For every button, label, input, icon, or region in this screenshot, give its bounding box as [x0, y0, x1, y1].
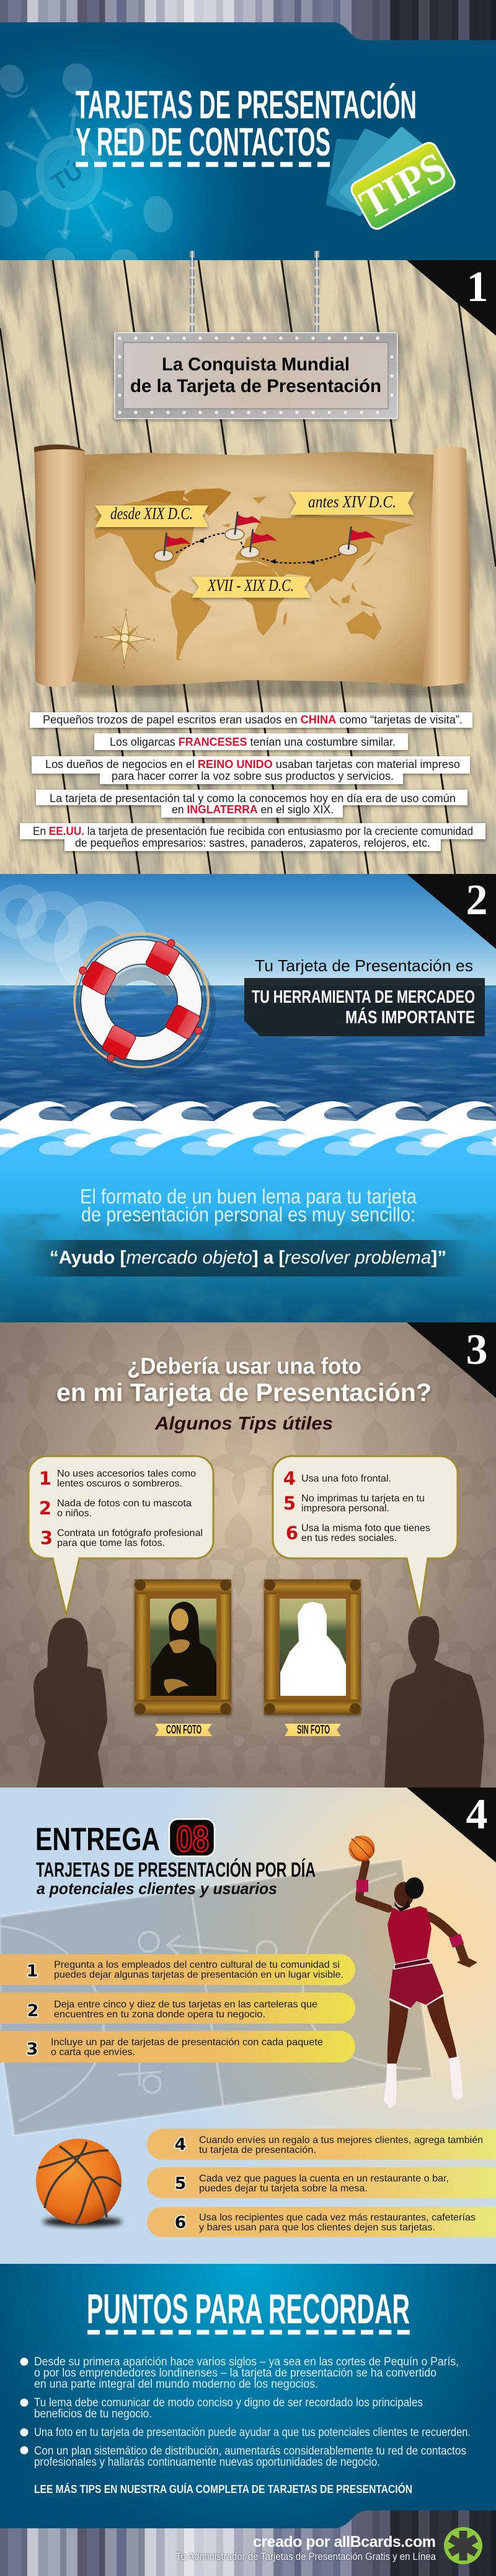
subheading — [36, 1858, 316, 1898]
tip bar 1 — [0, 1954, 355, 1985]
speech bubble: left: o niños. — [57, 1508, 92, 1519]
text boxes: history: Pequeños trozos de papel escritos eran usados en CHINA como “tarjetas de visita”. — [43, 714, 463, 726]
icon: network of contacts — [0, 58, 177, 274]
bullet points: Desde su primera aparición hace varios siglos – ya sea en las cortes de Pequín o París, — [34, 2356, 459, 2369]
banner: antes XIV: antes XIV D.C. — [308, 492, 396, 511]
number badge 3: 3 — [466, 1326, 487, 1374]
tip bar 5: 5 — [175, 2174, 186, 2193]
number badge 3 — [407, 1322, 496, 1398]
tip bar 4: tu tarjeta de presentación. — [199, 2145, 316, 2155]
read more link: LEE MÁS TIPS EN NUESTRA GUÍA COMPLETA DE TARJETAS DE PRESENTACIÓN — [34, 2482, 412, 2495]
roll: left — [34, 445, 85, 687]
jersey — [388, 1906, 432, 1965]
tip bar 5: puedes dejar tu tarjeta sobre la mesa. — [199, 2183, 368, 2194]
panel: section 3 wall — [0, 1322, 496, 1788]
wood background — [0, 260, 496, 874]
compass rose: N — [124, 608, 128, 613]
sky — [0, 874, 496, 986]
compass rose — [94, 608, 156, 670]
panel: puntos para recordar — [0, 2264, 496, 2576]
footer stripes — [0, 2510, 496, 2576]
water — [0, 1156, 496, 1323]
number badge 2 — [407, 874, 496, 949]
tip bar 4: 4 — [175, 2135, 186, 2154]
tip bar 6: Usa los recipientes que cada vez más restaurantes, cafeterías — [199, 2212, 476, 2223]
text boxes: history: En EE.UU. la tarjeta de presentación fue recibida con entusiasmo por la creciente comunidad — [33, 825, 473, 837]
tip bar 2 — [0, 1993, 355, 2024]
icon: life ring — [74, 933, 213, 1075]
painting: Mona Lisa — [150, 1599, 216, 1696]
waves — [0, 1096, 496, 1158]
text boxes: history: La tarjeta de presentación tal y como la conocemos hoy en día era de uso común — [50, 792, 456, 805]
flags — [154, 512, 376, 561]
speech bubble: left: para que tome las fotos. — [57, 1538, 165, 1548]
ribbon: con foto: CON FOTO — [166, 1723, 202, 1737]
banner: desde XIX: desde XIX D.C. — [110, 504, 193, 523]
ball — [348, 1835, 374, 1861]
ribbon: sin foto: SIN FOTO — [297, 1723, 330, 1737]
number badge 2: 2 — [466, 876, 487, 924]
roll: right — [422, 447, 469, 688]
man silhouette — [384, 1616, 484, 1788]
wallpaper — [0, 1322, 496, 1788]
world map — [94, 488, 414, 670]
white silhouette — [280, 1602, 346, 1696]
heading dashed underline — [87, 2330, 410, 2334]
woman silhouette — [33, 1618, 107, 1788]
background — [0, 1788, 496, 2264]
subheading: TARJETAS DE PRESENTACIÓN POR DÍA — [36, 1858, 316, 1881]
tip bar 3 — [0, 2031, 355, 2063]
shoes — [384, 2064, 396, 2108]
title — [76, 82, 417, 164]
subheading: a potenciales clientes y usuarios — [37, 1879, 277, 1898]
number badge 4 — [407, 1788, 496, 1862]
callout: herramienta — [244, 978, 485, 1036]
text boxes: history: de pequeños empresarios: sastres, panaderos, zapateros, relojeros, etc. — [75, 837, 430, 849]
legs — [388, 2001, 408, 2064]
text: tu tarjeta es: Tu Tarjeta de Presentación es — [255, 956, 473, 975]
parchment scroll — [20, 445, 485, 851]
speech bubble: left: 3 — [40, 1527, 53, 1548]
metal sign: La Conquista Mundial — [162, 354, 350, 375]
speech bubble: right: en tus redes sociales. — [301, 1533, 397, 1543]
tip bar 6: y bares usan para que los clientes dejen sus tarjetas. — [199, 2222, 435, 2233]
text boxes: history: Los dueños de negocios en el REINO UNIDO usaban tarjetas con material impreso — [45, 758, 460, 771]
ghost rings — [0, 891, 136, 983]
head — [394, 1882, 414, 1906]
tip bar 3: o carta que envíes. — [51, 2047, 135, 2058]
tip bar 6: 6 — [175, 2213, 186, 2232]
metal sign: de la Tarjeta de Presentación — [130, 376, 381, 396]
text boxes: history: para hacer correr la voz sobre sus productos y servicios. — [112, 770, 394, 782]
heading: ¿Debería usar una foto — [127, 1353, 361, 1379]
bullet points: en una parte integral del mundo moderno de los negocios. — [34, 2378, 318, 2391]
tip bar 1: 1 — [27, 1962, 38, 1981]
chains — [192, 251, 317, 333]
speech bubble: right: impresora personal. — [301, 1503, 389, 1514]
tip bar 1: Pregunta a los empleados del centro cultural de tu comunidad si — [54, 1960, 340, 1970]
heading — [56, 1353, 432, 1407]
icon: TIPS cards: TIPS — [352, 142, 454, 228]
ribbon: con foto — [155, 1723, 212, 1737]
bullet points: profesionales y hallarás continuamente nuevas oportunidades de negocio. — [34, 2456, 380, 2469]
speech bubble: right: Usa la misma foto que tienes — [301, 1523, 430, 1534]
tip bar 3: Incluye un par de tarjetas de presentación con cada paquete — [51, 2037, 323, 2048]
blue header background — [0, 22, 496, 260]
compass rose: S — [123, 666, 125, 670]
number badge 1 — [407, 260, 496, 336]
compass rose: W — [94, 635, 99, 640]
text: formato — [80, 1185, 417, 1226]
header panel — [0, 0, 496, 274]
tip bar 1: puedes dejar algunas tarjetas de presentación en un lugar visible. — [54, 1970, 343, 1980]
text: formato: de presentación personal es muy sencillo: — [81, 1203, 415, 1226]
tip bar 2: encuentres en tu zona donde opera tu negocio. — [54, 2009, 265, 2020]
basketball player — [348, 1835, 477, 2108]
sea — [0, 985, 496, 1122]
logo — [444, 2527, 482, 2564]
title dashed underline — [76, 162, 331, 167]
frame: con foto — [135, 1579, 231, 1714]
ribbon: sin foto — [285, 1723, 341, 1737]
speech bubble: right: 5 — [283, 1493, 296, 1514]
banner: antes XIV — [290, 492, 414, 515]
speech bubble: left: Nada de fotos con tu mascota — [57, 1498, 192, 1509]
arm raised — [359, 1862, 389, 1909]
bullet points: Tu lema debe comunicar de modo conciso y digno de ser recordado los principales — [34, 2396, 423, 2409]
bullet points — [20, 2356, 471, 2469]
tip bar 3: 3 — [27, 2040, 38, 2059]
tip bar 5 — [147, 2167, 496, 2198]
number badge 1: 1 — [466, 263, 489, 311]
speech bubble: right — [273, 1456, 458, 1615]
shorts — [389, 1963, 444, 2009]
text boxes: history — [20, 712, 485, 851]
digital counter: 08 — [176, 1819, 209, 1859]
tip bar 5: Cada vez que pagues la cuenta en un restaurante o bar, — [199, 2173, 449, 2184]
icon text: TÚ: TÚ — [46, 157, 87, 196]
tip bar 6 — [147, 2207, 496, 2237]
speech bubble: left: lentes oscuros o sombreros. — [57, 1478, 182, 1489]
speech bubble: right: 6 — [286, 1522, 298, 1543]
bullet points: beneficios de tu negocio. — [34, 2408, 152, 2421]
wrist band 2 — [449, 1934, 464, 1948]
court diagram — [0, 1859, 432, 2135]
icon: TIPS cards — [329, 129, 458, 232]
number badge 4: 4 — [466, 1791, 487, 1838]
speech bubble: left: Contrata un fotógrafo profesional — [57, 1528, 203, 1539]
bullet points: o por los emprendedores londinenses – la tarjeta de presentación se ha convertido — [34, 2367, 436, 2380]
tip bar 2: 2 — [27, 2001, 38, 2020]
banner: XVII - XIX: XVII - XIX D.C. — [207, 576, 294, 595]
callout: lema: “Ayudo [mercado objeto] a [resolver problema]” — [50, 1247, 446, 1268]
speech bubble: left: 2 — [39, 1498, 51, 1519]
speech bubble: right: 4 — [283, 1468, 296, 1489]
heading: entrega: ENTREGA — [35, 1822, 160, 1858]
speech bubble: left: 1 — [39, 1468, 51, 1489]
callout: lema — [25, 1240, 471, 1277]
frame: sin foto — [264, 1579, 361, 1714]
metal sign — [115, 333, 397, 419]
panel: section 2 sea — [0, 874, 496, 1323]
text: formato: El formato de un buen lema para tu tarjeta — [80, 1185, 417, 1208]
panel: section 4 basketball — [0, 1788, 496, 2264]
text boxes: history: Los oligarcas FRANCESES tenían una costumbre similar. — [110, 736, 396, 748]
tip bar 4 — [147, 2129, 496, 2160]
credit: creado por allBcards.com — [253, 2533, 436, 2551]
tip bar 4: Cuando envíes un regalo a tus mejores clientes, agrega también — [199, 2135, 483, 2146]
blue background — [0, 2264, 496, 2528]
tagline: Tu Administrador de Tarjetas de Presentación Gratis y en Línea — [175, 2551, 436, 2562]
heading: en mi Tarjeta de Presentación? — [56, 1378, 432, 1407]
basketball — [36, 2139, 122, 2227]
speech bubble: right: No imprimas tu tarjeta en tu — [301, 1493, 425, 1504]
wristband — [356, 1880, 368, 1892]
right arm — [428, 1916, 465, 1962]
dotted route — [174, 533, 340, 563]
compass rose: E — [152, 639, 156, 643]
speech bubble: right: Usa una foto frontal. — [301, 1474, 391, 1484]
top stripes — [0, 0, 496, 50]
subheading: Algunos Tips útiles — [154, 1413, 333, 1434]
speech bubble: left: No uses accesorios tales como — [57, 1469, 196, 1479]
text boxes: history: en INGLATERRA en el siglo XIX. — [172, 803, 334, 816]
speech bubble: left — [29, 1456, 213, 1615]
tip bar 2: Deja entre cinco y diez de tus tarjetas en las carteleras que — [54, 1999, 317, 2010]
banner: desde XIX — [95, 504, 208, 527]
